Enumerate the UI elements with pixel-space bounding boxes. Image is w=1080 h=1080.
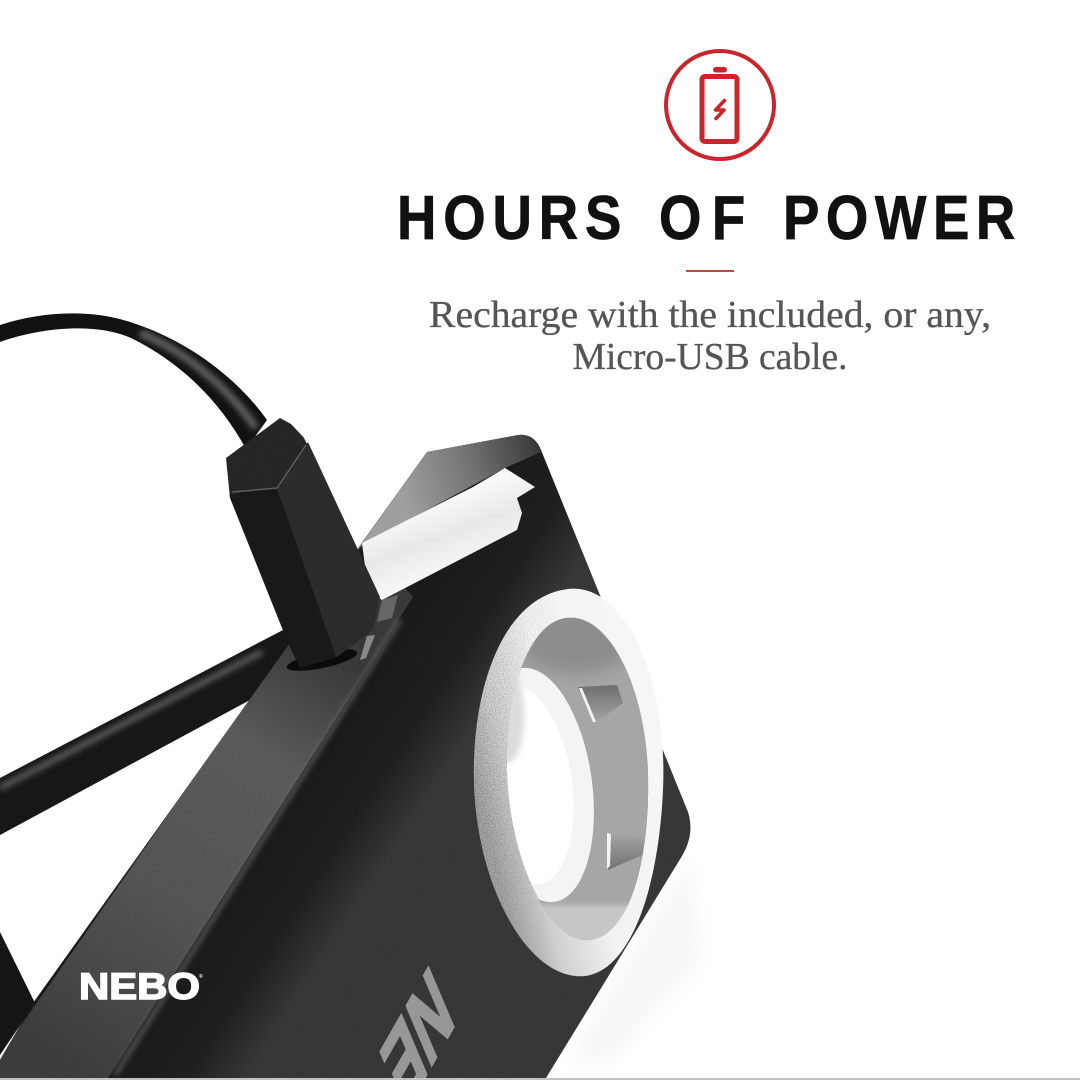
title: OF (659, 184, 745, 253)
connector silhouette (220, 415, 385, 672)
gray port cap block (377, 595, 398, 622)
bottom edge strip (0, 1078, 1080, 1080)
lens side reflection (507, 676, 526, 764)
reflector tab lower (608, 838, 644, 870)
connector grain (232, 440, 328, 492)
body text (429, 294, 991, 378)
title: HOURS (397, 184, 621, 253)
micro USB metal tip (360, 635, 375, 660)
connector left face (225, 488, 340, 672)
port opening (285, 645, 359, 675)
icon: battery with lightning bolt in red circle (666, 51, 774, 159)
product photo: work light with USB cable (0, 313, 1080, 1080)
lens (507, 686, 574, 884)
lower tab highlight (607, 833, 611, 869)
connector seam highlight (232, 445, 306, 492)
reflector tab upper (578, 685, 623, 718)
cable (0, 313, 267, 449)
stand bar (0, 630, 292, 835)
upper back plate (358, 434, 541, 550)
soft floor shadow (570, 860, 700, 1060)
title: POWER (783, 184, 1015, 253)
reflector interior (506, 618, 648, 940)
bezel texture (474, 596, 550, 964)
strain relief (226, 418, 307, 496)
left bevel (0, 560, 413, 1078)
bezel ring (474, 589, 663, 976)
title (397, 184, 1015, 253)
lower stand corner (0, 932, 35, 1055)
lens rim (507, 668, 594, 902)
connector right face (277, 442, 385, 660)
USB connector (220, 415, 385, 675)
ridge highlight (115, 620, 400, 1075)
NEBO logo: NEBO (79, 966, 200, 1007)
white rubber port flap (362, 468, 535, 600)
body text: Micro-USB cable. (572, 336, 848, 378)
NEBO logo: ® (199, 973, 203, 980)
red divider (686, 270, 734, 272)
surface grain (142, 440, 508, 930)
device body (0, 434, 690, 1078)
lens bezel assembly (467, 585, 663, 980)
upper tab highlight (579, 688, 596, 722)
body text: Recharge with the included, or any, (429, 294, 991, 336)
